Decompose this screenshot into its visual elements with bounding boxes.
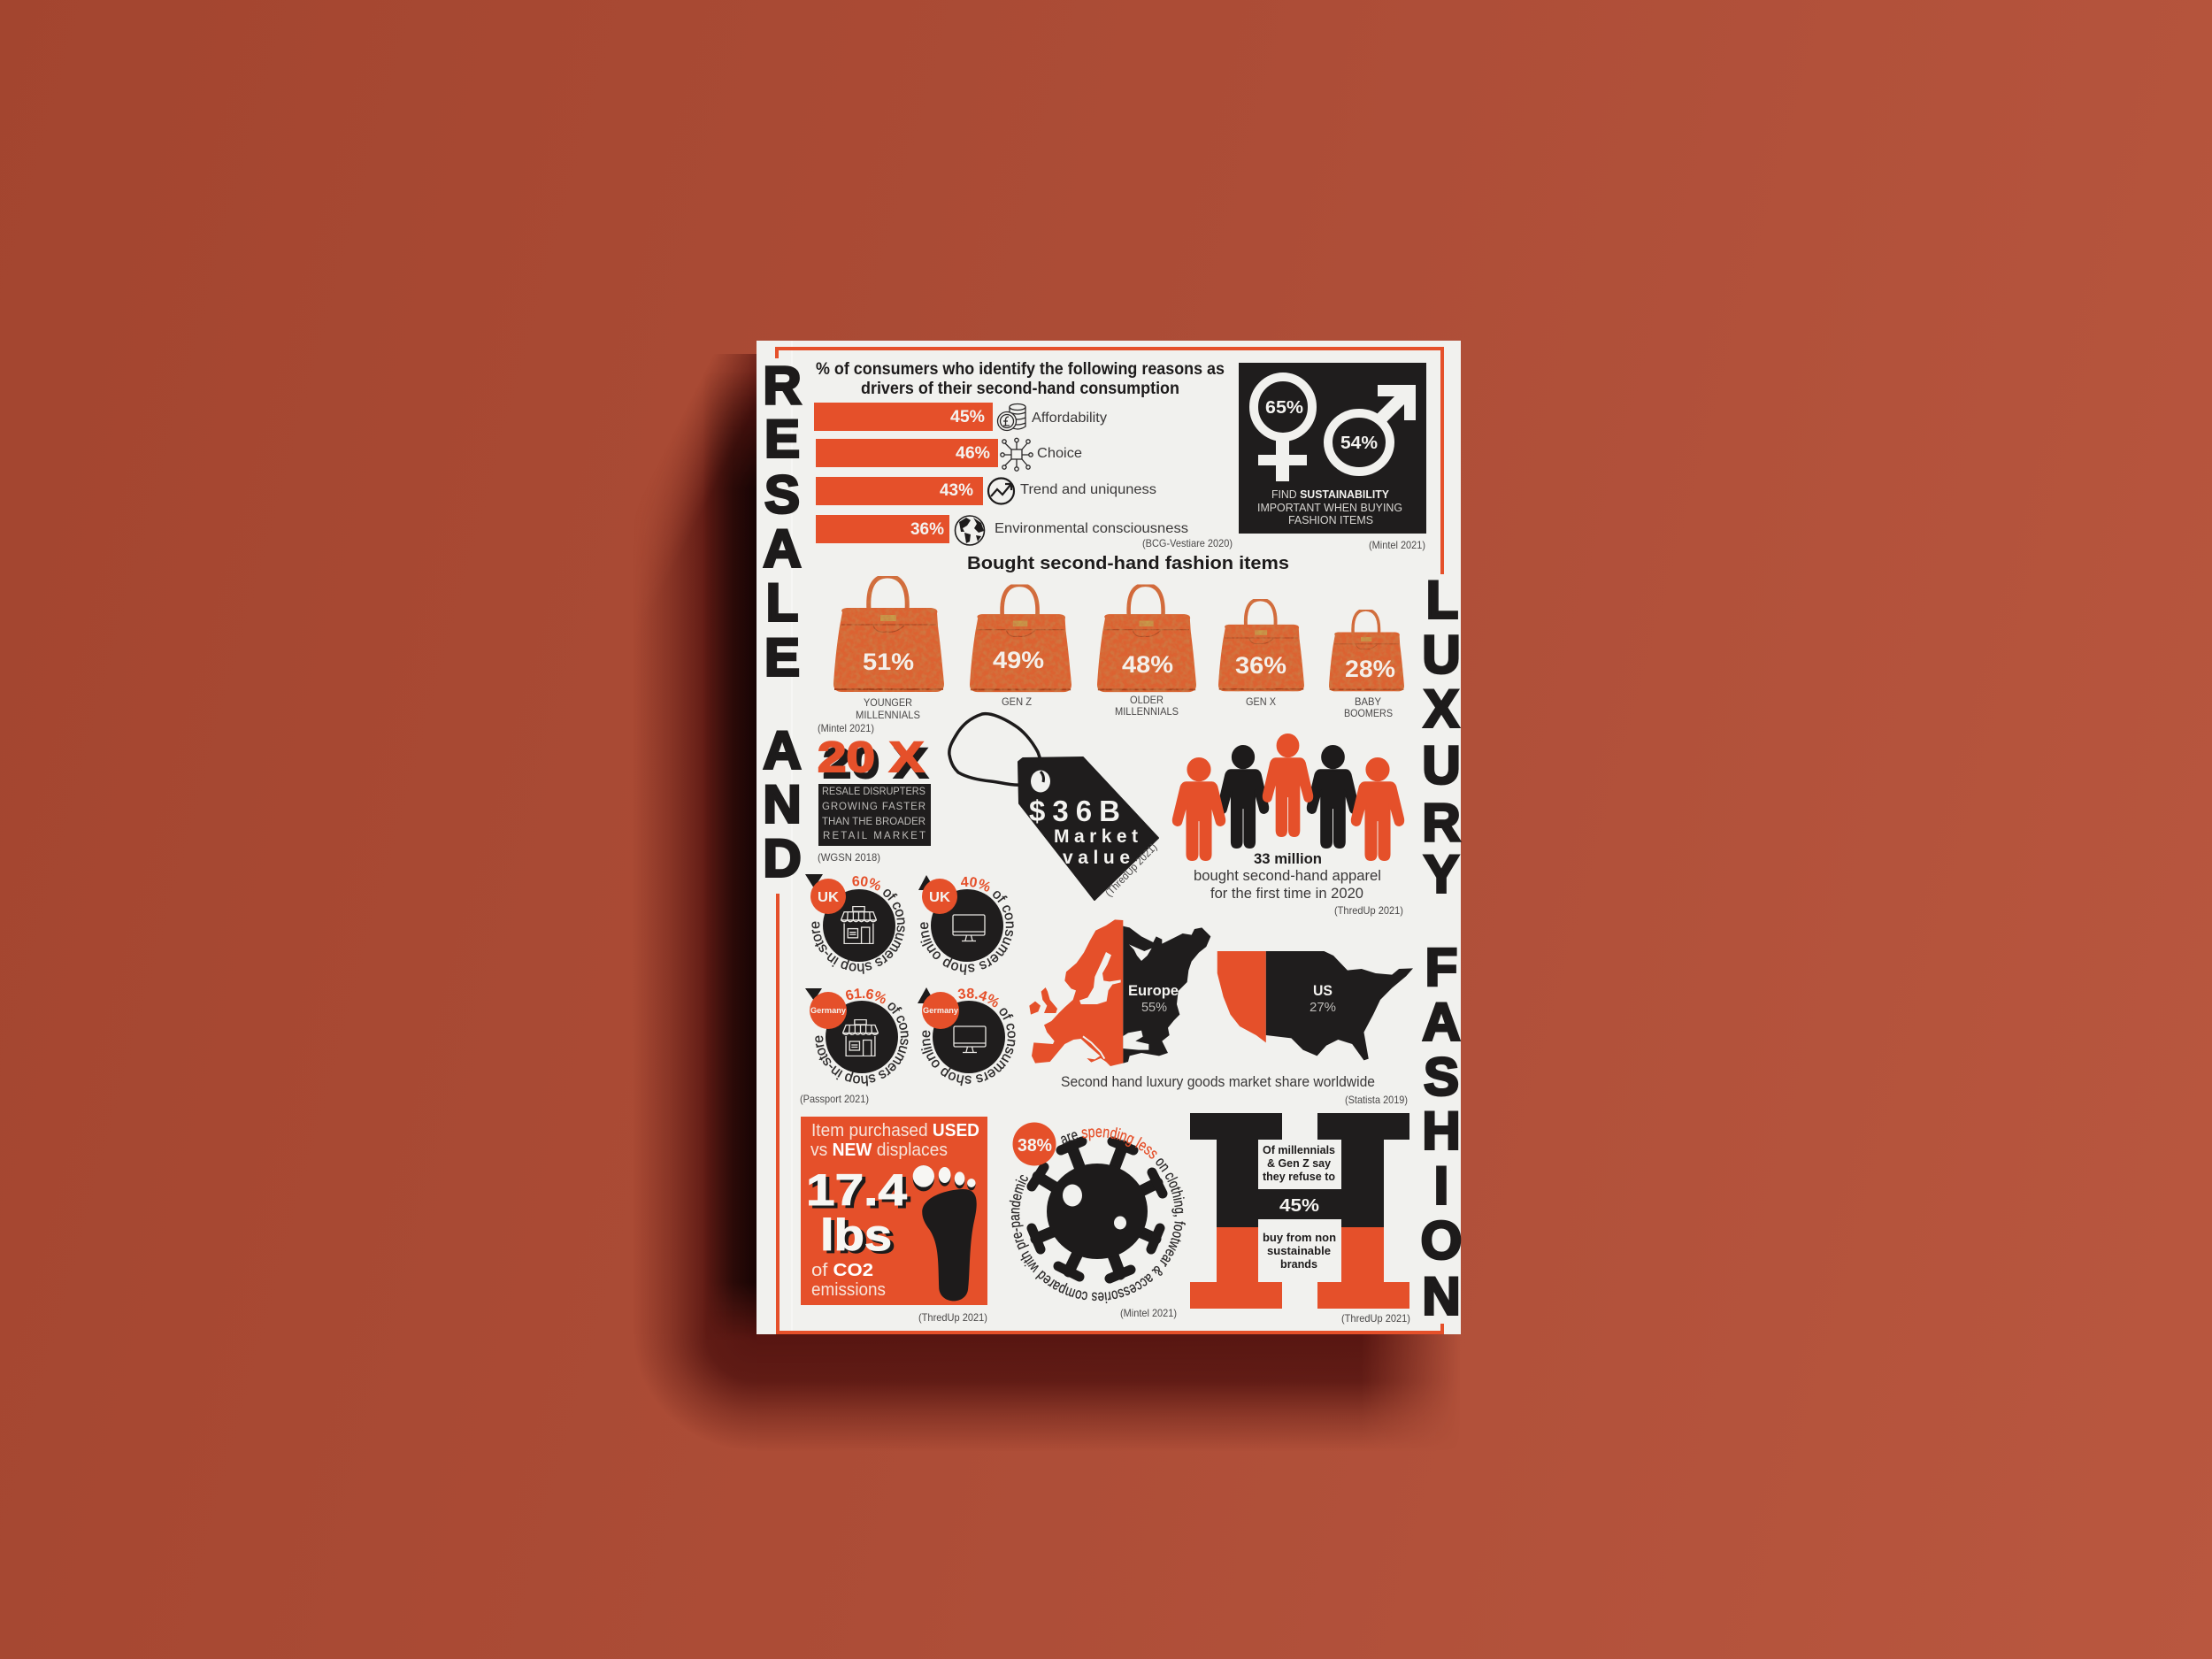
vertical title: RESALE AND: S xyxy=(764,465,800,524)
icon: female symbol 65% xyxy=(1254,377,1312,481)
vertical title: LUXURY: U xyxy=(1422,736,1461,795)
text: 33 million: bought second-hand apparel xyxy=(1194,867,1381,884)
circle: Germany in-store: Germany xyxy=(810,1006,846,1015)
caption: FIND SUSTAINABILITY xyxy=(1271,488,1389,501)
bag: older millennials xyxy=(1097,585,1196,718)
bag: younger millennials: 51% xyxy=(863,649,914,675)
bar: choice xyxy=(816,439,1082,467)
icon: footprint xyxy=(913,1165,977,1301)
panel: resale disrupters: RETAIL MARKET xyxy=(823,831,926,841)
map: US: US xyxy=(1313,982,1333,999)
icon: male symbol 54% xyxy=(1328,385,1416,472)
text: of millennials: Of millennials xyxy=(1263,1143,1335,1156)
icon: female symbol 65%: 65% xyxy=(1265,398,1303,418)
vertical title: LUXURY: L xyxy=(1426,570,1458,630)
icon: coins xyxy=(998,403,1025,430)
icon: male symbol 54%: 54% xyxy=(1340,434,1378,453)
poster drop shadow xyxy=(641,354,1451,1444)
heading: drivers of second-hand consumption xyxy=(816,360,1225,398)
bar: choice: 46% xyxy=(956,444,990,463)
text: buy from: brands xyxy=(1280,1257,1317,1271)
bar: environment xyxy=(816,515,1188,543)
text: buy from xyxy=(1263,1231,1336,1271)
text: 33 million: for the first time in 2020 xyxy=(1210,885,1363,902)
number: 17.4 lbs: 17.4 xyxy=(806,1165,907,1215)
stat: 20 X: 20 X xyxy=(818,734,924,781)
bar: affordability xyxy=(814,403,1107,431)
icon: trend line xyxy=(988,478,1014,504)
panel: sustainability gender split xyxy=(1239,363,1426,534)
bar: environment: 36% xyxy=(910,520,944,539)
stat: 20 X xyxy=(818,734,928,787)
circle: UK in-store: UK xyxy=(818,890,839,905)
vertical title: FASHION xyxy=(1421,938,1462,1325)
bar: choice: Choice xyxy=(1037,446,1082,461)
bag: older millennials: MILLENNIALS xyxy=(1115,705,1179,718)
text: of CO2 emissions: of CO2 xyxy=(811,1261,873,1280)
bar: trend: Trend and uniquness xyxy=(1020,482,1156,497)
circle: UK online: 40% of consumers shop online xyxy=(920,876,1014,975)
handbags row xyxy=(833,576,1404,721)
vertical title: LUXURY: X xyxy=(1424,680,1459,738)
panel: CO2 displaced xyxy=(801,1117,987,1305)
text: intro xyxy=(810,1121,979,1160)
price tag: $36B market value: Market xyxy=(1054,826,1138,847)
vertical title: RESALE AND: E xyxy=(764,628,800,687)
panel: resale disrupters: THAN THE BROADER xyxy=(822,817,926,827)
source: (Statista 2019) xyxy=(1345,1094,1408,1106)
people group xyxy=(1173,733,1403,860)
circle: Germany online: Germany xyxy=(923,1006,958,1015)
bag: baby boomers: 28% xyxy=(1345,656,1395,682)
vertical title: RESALE AND xyxy=(763,356,802,888)
map caption: Second hand luxury goods market share worldwide xyxy=(1061,1073,1375,1090)
number: 17.4 lbs xyxy=(806,1165,910,1263)
text: intro: vs NEW displaces xyxy=(810,1141,948,1160)
bag: baby boomers: BABY xyxy=(1355,695,1381,708)
circle: UK in-store: 60% of consumers shop in-store xyxy=(811,876,905,974)
map: Europe xyxy=(1029,919,1210,1066)
orange frame lines xyxy=(777,349,1442,1333)
bag: older millennials: OLDER xyxy=(1130,694,1164,706)
source: (Mintel 2021) xyxy=(818,722,874,734)
bag: gen x: 36% xyxy=(1235,652,1286,679)
caption xyxy=(1257,488,1402,526)
vertical title: LUXURY: R xyxy=(1422,793,1461,853)
vertical title: FASHION: S xyxy=(1424,1048,1459,1106)
heading: drivers of second-hand consumption: drivers of their second-hand consumption xyxy=(861,380,1179,398)
source: (ThredUp 2021) xyxy=(1341,1312,1410,1325)
vertical title: FASHION: N xyxy=(1422,1267,1461,1325)
circle: Germany online: 38.4% of consumers shop online xyxy=(921,987,1016,1087)
bag: younger millennials xyxy=(833,576,944,721)
bar: environment: Environmental consciousness xyxy=(995,521,1188,536)
text: intro: Item purchased USED xyxy=(811,1121,979,1141)
circle: UK online: UK xyxy=(929,890,950,905)
vertical title: LUXURY xyxy=(1422,570,1461,904)
number: 45%: 45% xyxy=(1279,1196,1319,1216)
stat: 20 X: 20 X xyxy=(823,741,928,787)
source: (Mintel 2021) xyxy=(1120,1307,1177,1319)
bag: gen x: GEN X xyxy=(1246,695,1276,708)
text: of CO2 emissions xyxy=(811,1261,886,1300)
vertical title: FASHION: O xyxy=(1421,1210,1462,1271)
vertical title: FASHION: H xyxy=(1422,1101,1461,1161)
source: (Mintel 2021) xyxy=(1369,539,1425,551)
vertical title: RESALE AND: N xyxy=(763,775,802,833)
price tag: $36B market value: $36B xyxy=(1029,795,1120,827)
vertical title: LUXURY: Y xyxy=(1424,844,1459,904)
heading: drivers of second-hand consumption: % of consumers who identify the following reasons as xyxy=(816,360,1225,379)
circular caption: are spending less on clothing, footwear & accessories compared with pre-pandemic xyxy=(1009,1127,1186,1303)
badge: 38%: 38% xyxy=(1018,1136,1052,1156)
bar: trend: 43% xyxy=(940,481,973,500)
map: US: 27% xyxy=(1310,1000,1336,1015)
caption: FASHION ITEMS xyxy=(1288,513,1373,526)
source: (ThredUp 2021) xyxy=(1334,904,1403,917)
source: (Passport 2021) xyxy=(800,1093,869,1105)
vertical title: FASHION: F xyxy=(1425,938,1457,996)
source rotated: (ThredUp 2021) xyxy=(1102,841,1159,899)
vertical title: LUXURY: U xyxy=(1422,625,1461,685)
source: (BCG-Vestiare 2020) xyxy=(1142,537,1233,549)
bar: affordability: 45% xyxy=(950,408,985,426)
map: US xyxy=(1217,951,1413,1060)
big letter H with stat xyxy=(1190,1113,1409,1309)
panel: resale disrupters xyxy=(818,784,931,846)
icon: network xyxy=(1001,438,1033,471)
bar: affordability: Affordability xyxy=(1032,411,1107,426)
bag: gen z xyxy=(970,585,1071,708)
caption: IMPORTANT WHEN BUYING xyxy=(1257,501,1402,514)
bar: trend xyxy=(816,477,1156,505)
vertical title: RESALE AND: R xyxy=(763,356,802,416)
bag: younger millennials: MILLENNIALS xyxy=(856,709,920,721)
bag: gen z: GEN Z xyxy=(1002,695,1032,708)
poster sheet xyxy=(757,341,1462,1334)
vertical title: FASHION: A xyxy=(1422,993,1461,1051)
number: 17.4 lbs: 17.4 xyxy=(810,1168,910,1217)
text: of millennials xyxy=(1263,1143,1335,1183)
price tag: $36B market value xyxy=(949,714,1158,900)
number: 17.4 lbs: lbs xyxy=(820,1210,892,1260)
bag: older millennials: 48% xyxy=(1122,651,1173,678)
vertical title: RESALE AND: A xyxy=(763,518,802,579)
price tag: $36B market value: value xyxy=(1063,848,1130,868)
bag: gen x xyxy=(1218,599,1304,708)
bag: baby boomers: BOOMERS xyxy=(1344,707,1393,719)
vertical title: RESALE AND: E xyxy=(764,409,800,469)
heading: bought second-hand: Bought second-hand fashion items xyxy=(967,554,1289,573)
text: 33 million xyxy=(1194,850,1381,902)
badge: 38% xyxy=(1012,1122,1056,1166)
text: of CO2 emissions: emissions xyxy=(811,1280,886,1300)
virus with circular text xyxy=(1009,1122,1186,1303)
text: of millennials: they refuse to xyxy=(1263,1170,1335,1183)
bag: gen z: 49% xyxy=(993,647,1044,673)
number: 17.4 lbs: lbs xyxy=(824,1213,895,1263)
text: 33 million: 33 million xyxy=(1254,850,1322,867)
bag: younger millennials: YOUNGER xyxy=(864,696,912,709)
text: buy from: sustainable xyxy=(1267,1244,1331,1257)
source: (WGSN 2018) xyxy=(818,851,880,864)
vertical title: RESALE AND: A xyxy=(763,720,802,780)
vertical title: FASHION: I xyxy=(1434,1156,1448,1216)
vertical title: RESALE AND: L xyxy=(766,573,798,632)
vertical title: RESALE AND: D xyxy=(763,828,802,888)
source: (ThredUp 2021) xyxy=(918,1311,987,1324)
panel: resale disrupters: RESALE DISRUPTERS xyxy=(822,787,926,797)
map: Europe: Europe xyxy=(1128,982,1179,999)
circle: Germany in-store: 61.6% of consumers shop in-store xyxy=(815,988,909,1087)
icon: virus xyxy=(1032,1141,1163,1279)
panel: resale disrupters: GROWING FASTER xyxy=(822,802,926,812)
bag: baby boomers xyxy=(1329,610,1404,719)
bar chart: reasons xyxy=(814,403,1233,549)
icon: globe xyxy=(956,516,984,545)
map: Europe: 55% xyxy=(1141,1000,1167,1015)
text: of millennials: & Gen Z say xyxy=(1267,1156,1332,1170)
text: buy from: buy from non xyxy=(1263,1231,1336,1244)
